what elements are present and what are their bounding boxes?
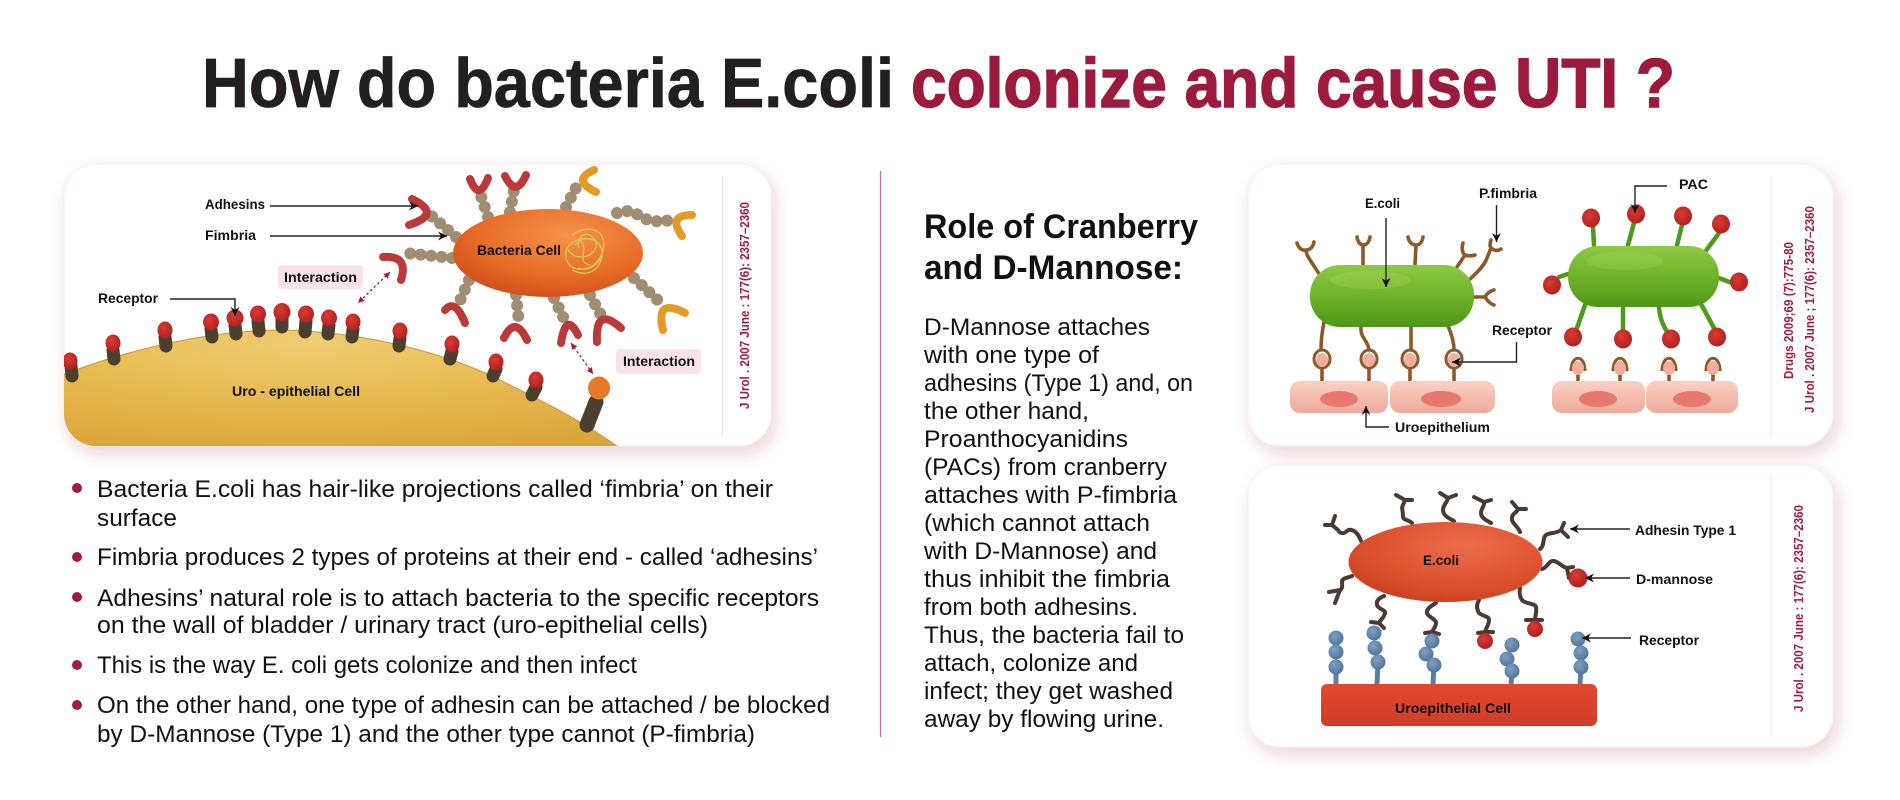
- bullet list: [72, 476, 830, 748]
- blue receptors: [1328, 626, 1588, 685]
- label: p.fimbria: [1479, 186, 1538, 242]
- label: d-mannose: [1585, 572, 1714, 587]
- orange receptor: [587, 376, 610, 425]
- label: p.fimbria: P.fimbria: [1479, 186, 1538, 201]
- left e.coli with p-fimbria: [1297, 237, 1501, 382]
- source references: J Urol . 2007 June ; 177(6): 2357–2360: [1803, 206, 1817, 413]
- d-mannose balls: [1477, 568, 1588, 649]
- bullet list: on the wall of bladder / urinary tract (uro-epithelial cells): [97, 612, 708, 639]
- heading: role of cranberry and d-mannose: and D-Mannose:: [924, 249, 1183, 287]
- panel: d-mannose type 1 adhesin: [1248, 465, 1833, 747]
- source references: [1782, 206, 1817, 413]
- label: uroepithelium: Uroepithelium: [1395, 420, 1490, 435]
- uroepithelial cell block: [1321, 684, 1597, 726]
- label: receptor: [1582, 633, 1700, 648]
- paragraph: role text: thus inhibit the fimbria: [924, 566, 1171, 593]
- right uroepithelium cells: [1552, 358, 1738, 413]
- heading: role of cranberry and d-mannose: Role of Cranberry: [924, 208, 1198, 246]
- paragraph: role text: away by flowing urine.: [924, 706, 1164, 733]
- label: d-mannose: D-mannose: [1636, 572, 1714, 587]
- source reference: J Urol . 2007 June : 177(6): 2357–2360: [738, 202, 752, 409]
- receptors on cell surface: [62, 303, 544, 395]
- bullet list: surface: [97, 505, 177, 532]
- label: e.coli: [1365, 196, 1400, 287]
- bullet list: by D-Mannose (Type 1) and the other type cannot (P-fimbria): [97, 721, 755, 748]
- label: adhesins: Adhesins: [205, 197, 265, 212]
- right e.coli with pac: [1543, 204, 1748, 348]
- label: adhesin type 1: Adhesin Type 1: [1635, 523, 1736, 538]
- label: uro-epithelial cell: Uro - epithelial Cell: [232, 384, 360, 399]
- bacteria cell body: Bacteria Cell: [477, 243, 561, 258]
- interaction badge: Interaction: [623, 354, 695, 369]
- label: fimbria: Fimbria: [205, 228, 257, 243]
- adhesin type 1 fimbriae: [1325, 493, 1573, 634]
- bullet list: On the other hand, one type of adhesin can be attached / be blocked: [97, 692, 830, 719]
- interaction badge: [278, 265, 390, 303]
- paragraph: role text: Thus, the bacteria fail to: [924, 622, 1184, 649]
- label: pac: [1635, 177, 1708, 213]
- bullet list: This is the way E. coli gets colonize and then infect: [97, 652, 637, 679]
- bullet list: Fimbria produces 2 types of proteins at their end - called ‘adhesins’: [97, 544, 818, 571]
- left uroepithelium cells: [1290, 381, 1495, 413]
- paragraph: role text: infect; they get washed: [924, 678, 1173, 705]
- paragraph: role text: the other hand,: [924, 398, 1089, 425]
- paragraph: role text: Proanthocyanidins: [924, 426, 1128, 453]
- label: receptor: Receptor: [98, 291, 159, 306]
- paragraph: role text: [923, 314, 1193, 733]
- label: receptor: Receptor: [1639, 633, 1700, 648]
- label: pac: PAC: [1679, 177, 1708, 192]
- label: uroepithelium: [1366, 406, 1490, 435]
- interaction badge: [571, 343, 701, 374]
- title: colonize and cause UTI ?: [911, 44, 1675, 122]
- label: e.coli: E.coli: [1365, 196, 1400, 211]
- fimbria chains: [406, 180, 670, 323]
- paragraph: role text: attach, colonize and: [924, 650, 1138, 677]
- e.coli body: E.coli: [1423, 553, 1459, 568]
- paragraph: role text: with D-Mannose) and: [923, 538, 1157, 565]
- paragraph: role text: D-Mannose attaches: [924, 314, 1150, 341]
- e.coli body: [1348, 522, 1542, 602]
- label: receptor: [98, 291, 235, 316]
- title: How do bacteria E.coli: [202, 44, 894, 122]
- uro-epithelial cell: [50, 303, 625, 452]
- paragraph: role text: (which cannot attach: [924, 510, 1150, 537]
- adhesins: [383, 170, 692, 343]
- bullet list: Bacteria E.coli has hair-like projections called ‘fimbria’ on their: [97, 476, 773, 503]
- source reference: J Urol . 2007 June : 177(6): 2357–2360: [1792, 505, 1806, 712]
- panel: p-fimbria and pac: [1248, 164, 1833, 446]
- interaction badge: Interaction: [284, 270, 357, 285]
- panel: bacteria adhesion diagram: [50, 164, 771, 452]
- heading: role of cranberry and d-mannose: [924, 208, 1198, 287]
- label: receptor: Receptor: [1492, 323, 1553, 338]
- paragraph: role text: from both adhesins.: [924, 594, 1138, 621]
- bullet list: Adhesins’ natural role is to attach bacteria to the specific receptors: [97, 585, 819, 612]
- uroepithelial cell block: Uroepithelial Cell: [1395, 701, 1511, 716]
- title: [202, 44, 1675, 122]
- paragraph: role text: (PACs) from cranberry: [924, 454, 1167, 481]
- bacteria cell body: [453, 209, 643, 297]
- paragraph: role text: attaches with P-fimbria: [924, 482, 1178, 509]
- label: receptor: [1452, 323, 1553, 362]
- paragraph: role text: adhesins (Type 1) and, on: [924, 370, 1193, 397]
- source references: Drugs 2009;69 (7):775-80: [1782, 242, 1796, 379]
- paragraph: role text: with one type of: [923, 342, 1099, 369]
